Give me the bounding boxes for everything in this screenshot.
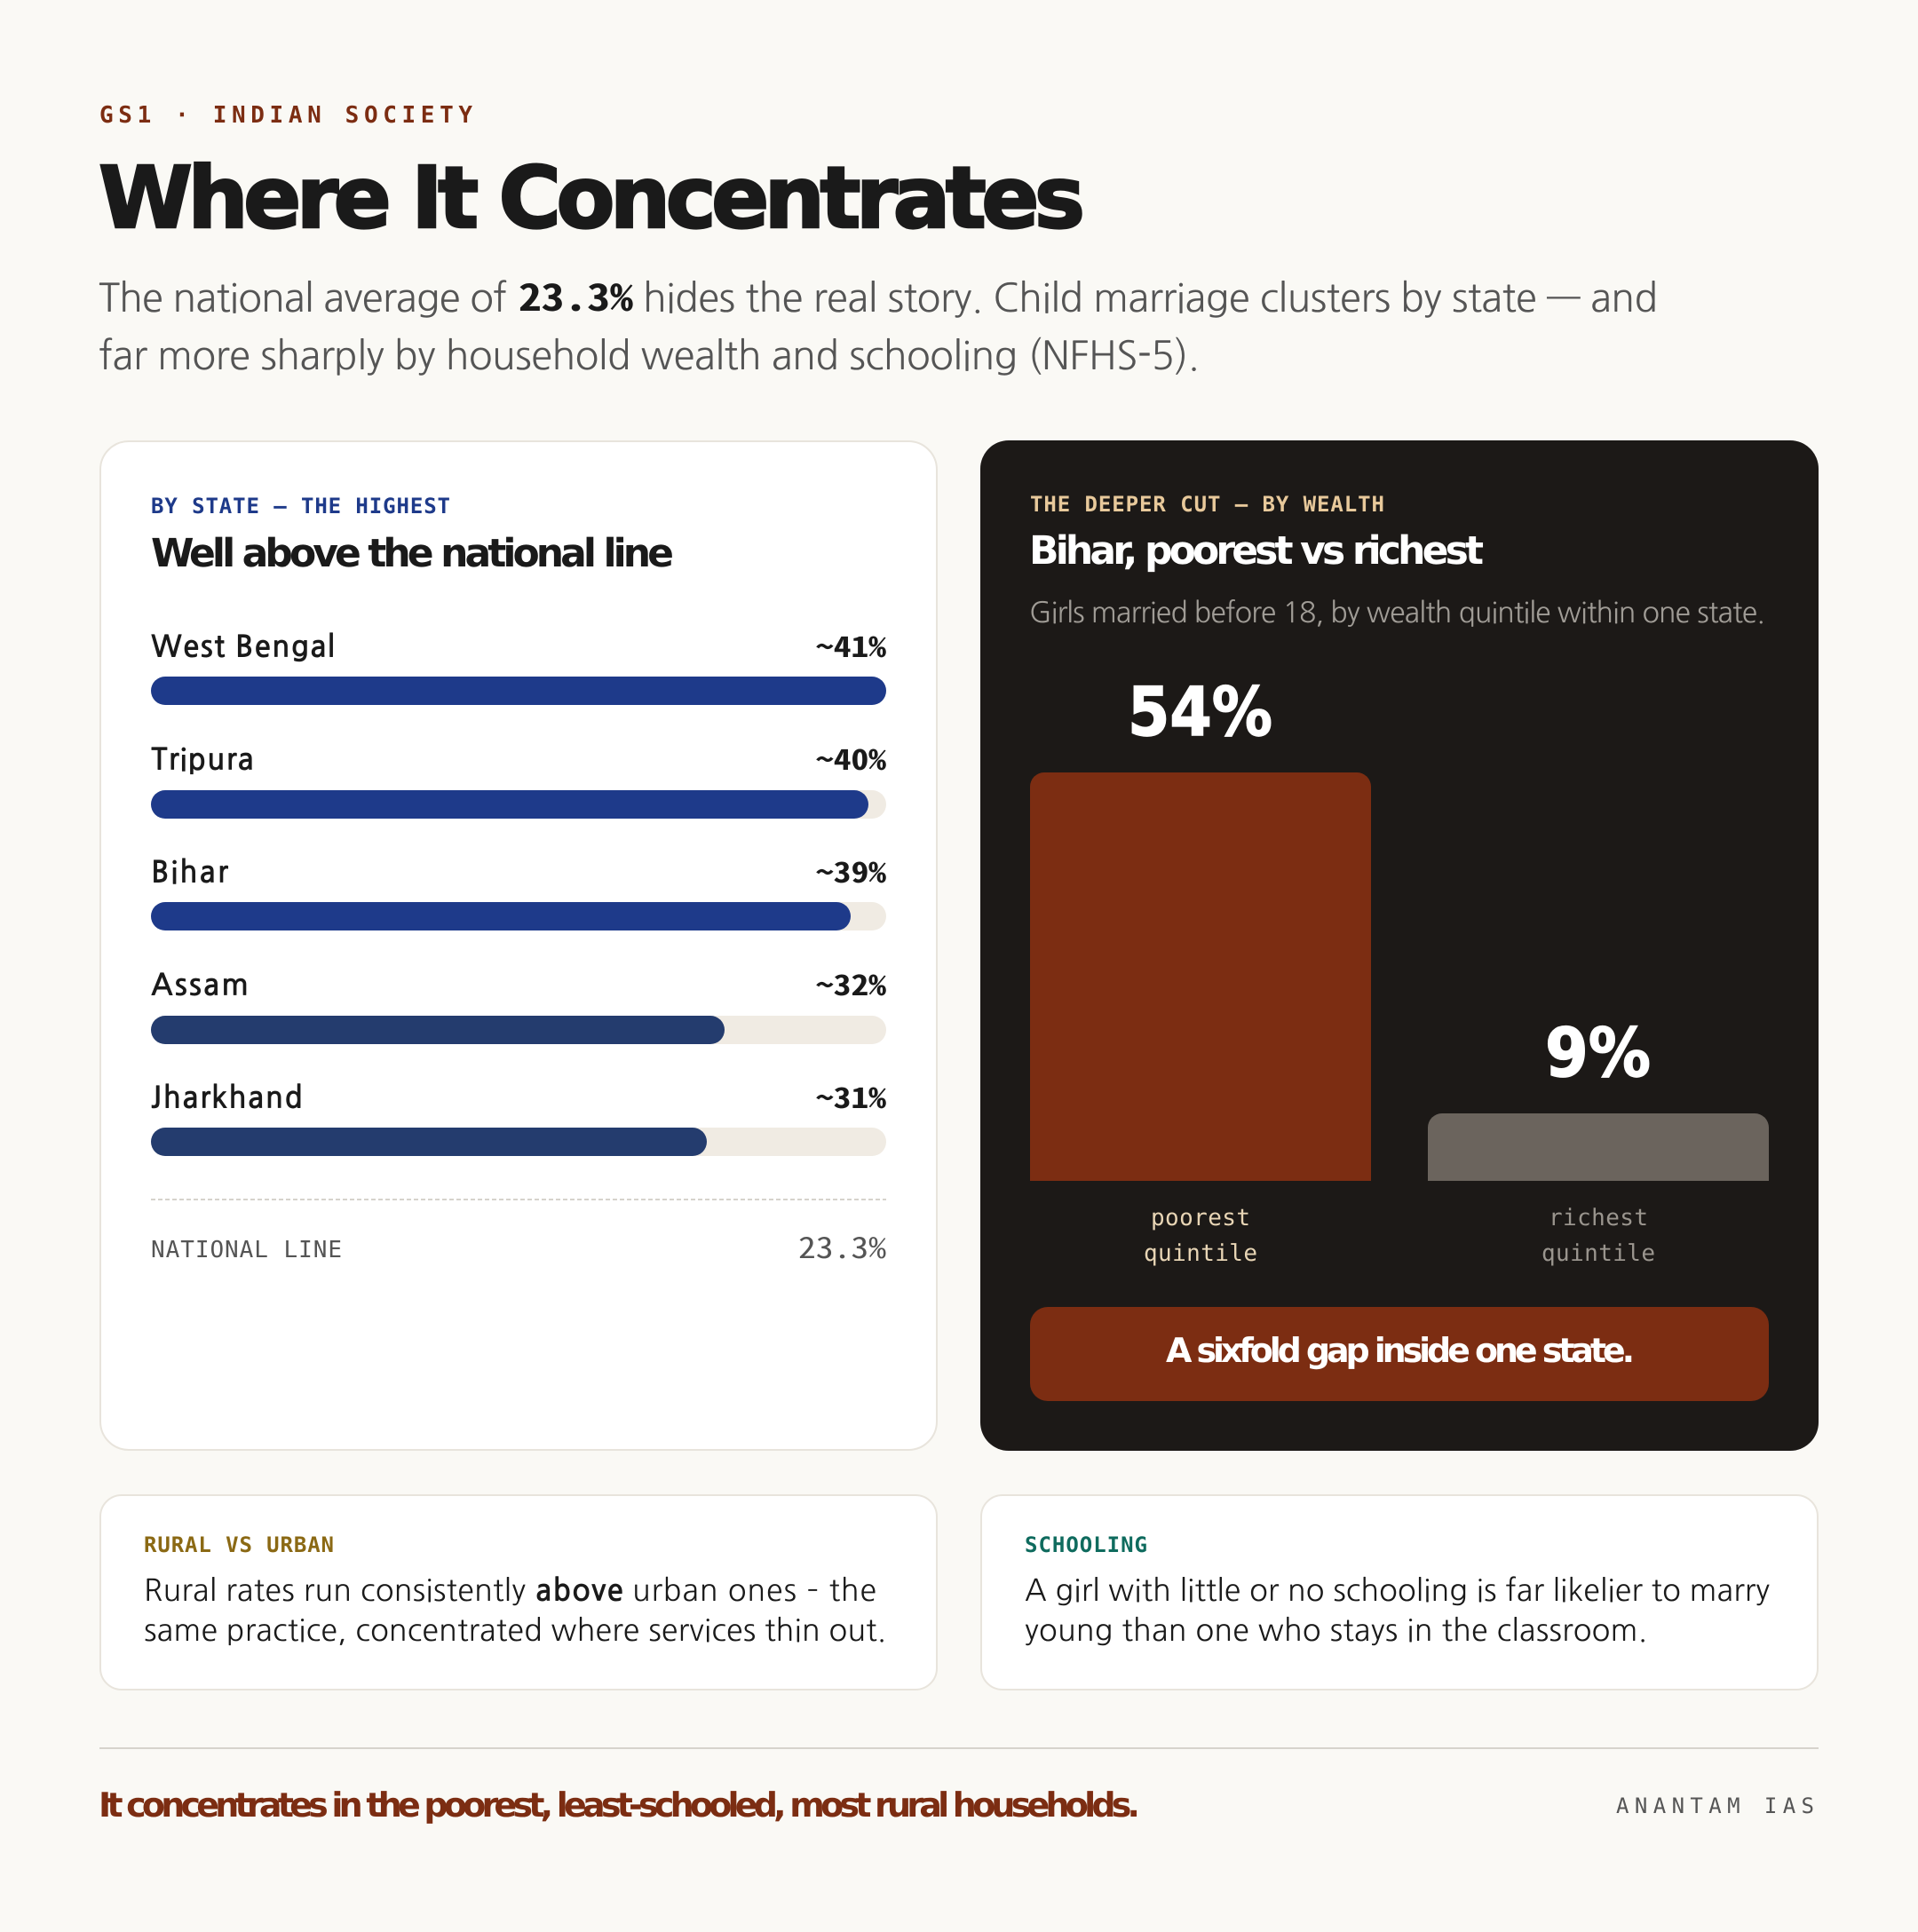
card label: SCHOOLING — [1025, 1532, 1147, 1557]
card: schooling — [981, 1495, 1818, 1690]
bar: Tripura: Tripura — [151, 745, 254, 775]
conclusion: It concentrates in the poorest, least-schooled, most rural households. — [99, 1786, 1140, 1825]
national line label: NATIONAL LINE — [151, 1237, 342, 1263]
brand: ANANTAM IAS — [1616, 1793, 1814, 1818]
bar: West Bengal: West Bengal — [151, 632, 335, 662]
column: richest — [1428, 1013, 1769, 1267]
card: rural vs urban — [100, 1495, 937, 1690]
national line value: 23.3% — [798, 1224, 887, 1267]
bar: Jharkhand: Jharkhand — [151, 1083, 303, 1113]
card text: same practice, concentrated where services thin out. — [144, 1615, 886, 1646]
callout — [1030, 1307, 1769, 1401]
bar: West Bengal: ~41% — [816, 625, 886, 666]
subtitle — [99, 268, 1658, 376]
card text: A girl with little or no schooling is far likelier to marry — [1025, 1575, 1770, 1606]
column: richest: quintile — [1542, 1240, 1655, 1267]
subtitle: 23.3% — [519, 268, 633, 322]
column: poorest: poorest — [1151, 1205, 1250, 1231]
bar: Bihar: Bihar — [151, 858, 229, 888]
panel: by state — [100, 441, 937, 1450]
column: richest: richest — [1549, 1205, 1648, 1231]
title: Where It Concentrates — [99, 148, 1085, 248]
card text — [144, 1575, 886, 1646]
bar: Tripura — [151, 738, 886, 819]
bar: Jharkhand: ~31% — [816, 1076, 886, 1117]
column: poorest: 54% — [1128, 672, 1272, 751]
bar: Bihar: ~39% — [816, 851, 886, 891]
panel heading: Bihar, poorest vs richest — [1029, 528, 1484, 574]
panel label: BY STATE — THE HIGHEST — [151, 494, 450, 519]
bar: Tripura: ~40% — [816, 738, 886, 779]
bar: West Bengal — [151, 625, 886, 705]
bar: Assam — [151, 963, 886, 1044]
panel label: THE DEEPER CUT — BY WEALTH — [1030, 492, 1384, 517]
panel: wealth — [980, 440, 1819, 1451]
card text — [1025, 1575, 1770, 1646]
bar: Bihar — [151, 851, 886, 930]
card text: urban ones – the — [632, 1575, 876, 1605]
bar: Assam: ~32% — [816, 963, 886, 1004]
column: poorest: quintile — [1144, 1240, 1257, 1267]
subtitle: far more sharply by household wealth and schooling (NFHS-5). — [99, 337, 1200, 376]
card text: Rural rates run consistently — [144, 1575, 526, 1606]
card text: above — [535, 1576, 623, 1606]
card text: young than one who stays in the classroom. — [1025, 1615, 1647, 1646]
subtitle: The national average of — [99, 279, 507, 318]
card label: RURAL VS URBAN — [144, 1532, 334, 1557]
column: richest: 9% — [1545, 1013, 1651, 1092]
column: poorest — [1030, 672, 1371, 1267]
callout: A sixfold gap inside one state. — [1166, 1331, 1635, 1370]
subtitle: hides the real story. Child marriage clusters by state — and — [643, 279, 1658, 318]
panel heading: Well above the national line — [151, 531, 674, 576]
bar: Jharkhand — [151, 1076, 886, 1156]
panel note: Girls married before 18, by wealth quintile within one state. — [1029, 598, 1765, 627]
bar: Assam: Assam — [151, 970, 249, 1001]
eyebrow: GS1 · INDIAN SOCIETY — [99, 102, 472, 129]
